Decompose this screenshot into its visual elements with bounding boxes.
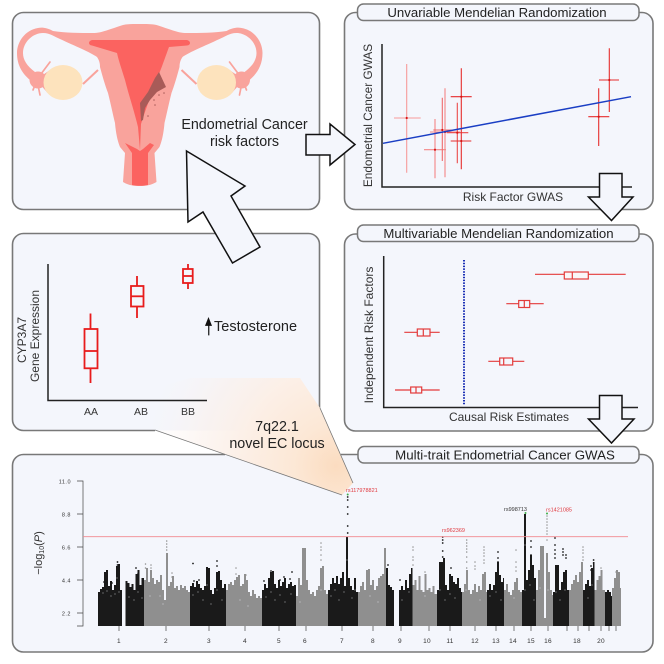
panel: multivariable MR	[344, 225, 653, 431]
panel title: Multivariable Mendelian Randomization	[383, 226, 614, 241]
panel title: Unvariable Mendelian Randomization	[387, 5, 607, 20]
arrow: multivariable MR to GWAS	[588, 396, 634, 443]
chart: CYP3A7 expression by genotype	[15, 264, 297, 418]
y axis label: Endometrial Cancer GWAS	[361, 44, 375, 187]
forest row 1	[535, 272, 626, 279]
callout: 7q22.1 zoom wedge	[130, 378, 353, 495]
uterine cavity	[89, 40, 190, 150]
chromosome labels	[117, 638, 605, 645]
chromosome labels: 11	[446, 638, 454, 645]
chromosome labels: 9	[398, 638, 402, 645]
left half of uterus with tube and ovary	[17, 24, 140, 186]
chromosome labels: 5	[277, 638, 281, 645]
box AB	[131, 276, 144, 318]
y tick labels	[59, 480, 71, 618]
forest row 2	[506, 300, 544, 308]
icon: uterus illustration	[17, 24, 262, 186]
SNP label rs117978821: rs117978821	[346, 488, 378, 494]
forest axes	[384, 256, 638, 408]
chromosome labels: 2	[164, 638, 168, 645]
forest row 4	[488, 358, 524, 365]
y axis	[77, 481, 83, 626]
y axis label: Independent Risk Factors	[362, 267, 376, 403]
grey outlier points	[146, 516, 616, 577]
y axis label line 2: Gene Expression	[28, 290, 42, 382]
y tick labels: 2.2	[62, 612, 71, 618]
chromosome labels: 10	[423, 638, 431, 645]
null line	[463, 260, 465, 405]
chromosome labels: 4	[243, 638, 247, 645]
x axis label: Causal Risk Estimates	[449, 410, 569, 424]
chromosome labels: 15	[527, 638, 535, 645]
arrow up	[206, 318, 212, 335]
box BB	[183, 264, 193, 289]
chromosome labels: 1	[117, 638, 121, 645]
white specks in the plot columns	[103, 545, 592, 606]
y tick labels: 6.6	[62, 546, 71, 552]
chromosome labels: 6	[303, 638, 307, 645]
callout text line 2: novel EC locus	[229, 436, 325, 452]
chromosome labels: 16	[544, 638, 552, 645]
y axis label: CYP3A7	[15, 317, 29, 363]
chromosome labels: 18	[573, 638, 581, 645]
y tick labels: 8.8	[62, 512, 71, 518]
testosterone label: Testosterone	[214, 319, 297, 335]
Manhattan panel title: Multi-trait Endometrial Cancer GWAS	[395, 448, 615, 462]
tumour	[140, 72, 166, 121]
label BB: BB	[181, 406, 195, 418]
scatter error bars	[394, 48, 619, 178]
chromosome labels: 12	[471, 638, 479, 645]
black outlier points	[104, 497, 594, 583]
SNP label rs962369: rs962369	[442, 528, 465, 534]
genome-wide significance line	[83, 536, 628, 538]
heading: Endometrial Cancer risk factors: Endometrial Cancer	[181, 117, 308, 133]
grey chromosomes	[144, 546, 621, 626]
label AA: AA	[84, 406, 98, 418]
chromosome labels: 14	[509, 638, 517, 645]
SNP label rs1421085: rs1421085	[546, 508, 572, 514]
box plot axes	[48, 264, 207, 400]
chromosome labels: 8	[371, 638, 375, 645]
SNP label rs998713: rs998713	[504, 507, 527, 513]
y tick labels: 11.0	[59, 480, 71, 486]
black chromosomes	[98, 514, 612, 626]
chromosome labels: 13	[492, 638, 500, 645]
panel: CYP3A7 background	[12, 234, 320, 430]
heading: Endometrial Cancer risk factors	[181, 117, 308, 150]
chromosome labels: 7	[340, 638, 344, 645]
forest row 5	[395, 387, 440, 393]
heading: Endometrial Cancer risk factors: risk factors	[210, 134, 279, 150]
arrow: CYP3A7 to risk factors	[186, 151, 260, 263]
chart: Manhattan plot	[33, 480, 628, 645]
forest row 3	[404, 329, 440, 336]
y axis title: P)	[33, 531, 45, 542]
arrow: risk factors to univariable MR	[306, 124, 355, 165]
arrow: univariable to multivariable MR	[588, 174, 633, 220]
scatter points	[407, 80, 609, 150]
y axis title: 10	[39, 546, 46, 554]
cervical canal	[125, 143, 154, 186]
scatter axes	[382, 44, 632, 187]
box AA	[84, 314, 98, 383]
x axis ticks	[119, 626, 616, 631]
x axis label: Risk Factor GWAS	[463, 190, 563, 204]
panel: univariable MR	[344, 4, 653, 210]
tumour specks	[148, 85, 164, 116]
chromosome labels: 3	[207, 638, 211, 645]
regression line	[383, 97, 631, 143]
panel: Manhattan background	[12, 454, 653, 652]
chromosome labels: 20	[597, 638, 605, 645]
lead SNP markers	[348, 494, 547, 514]
y tick labels: 4.4	[62, 578, 71, 584]
right half of uterus with tube and ovary	[140, 24, 262, 186]
label AB: AB	[134, 406, 148, 418]
y axis title: −log	[33, 554, 45, 575]
y axis title: (	[33, 542, 45, 546]
panel: uterus	[12, 12, 320, 210]
callout text: 7q22.1	[255, 419, 299, 435]
